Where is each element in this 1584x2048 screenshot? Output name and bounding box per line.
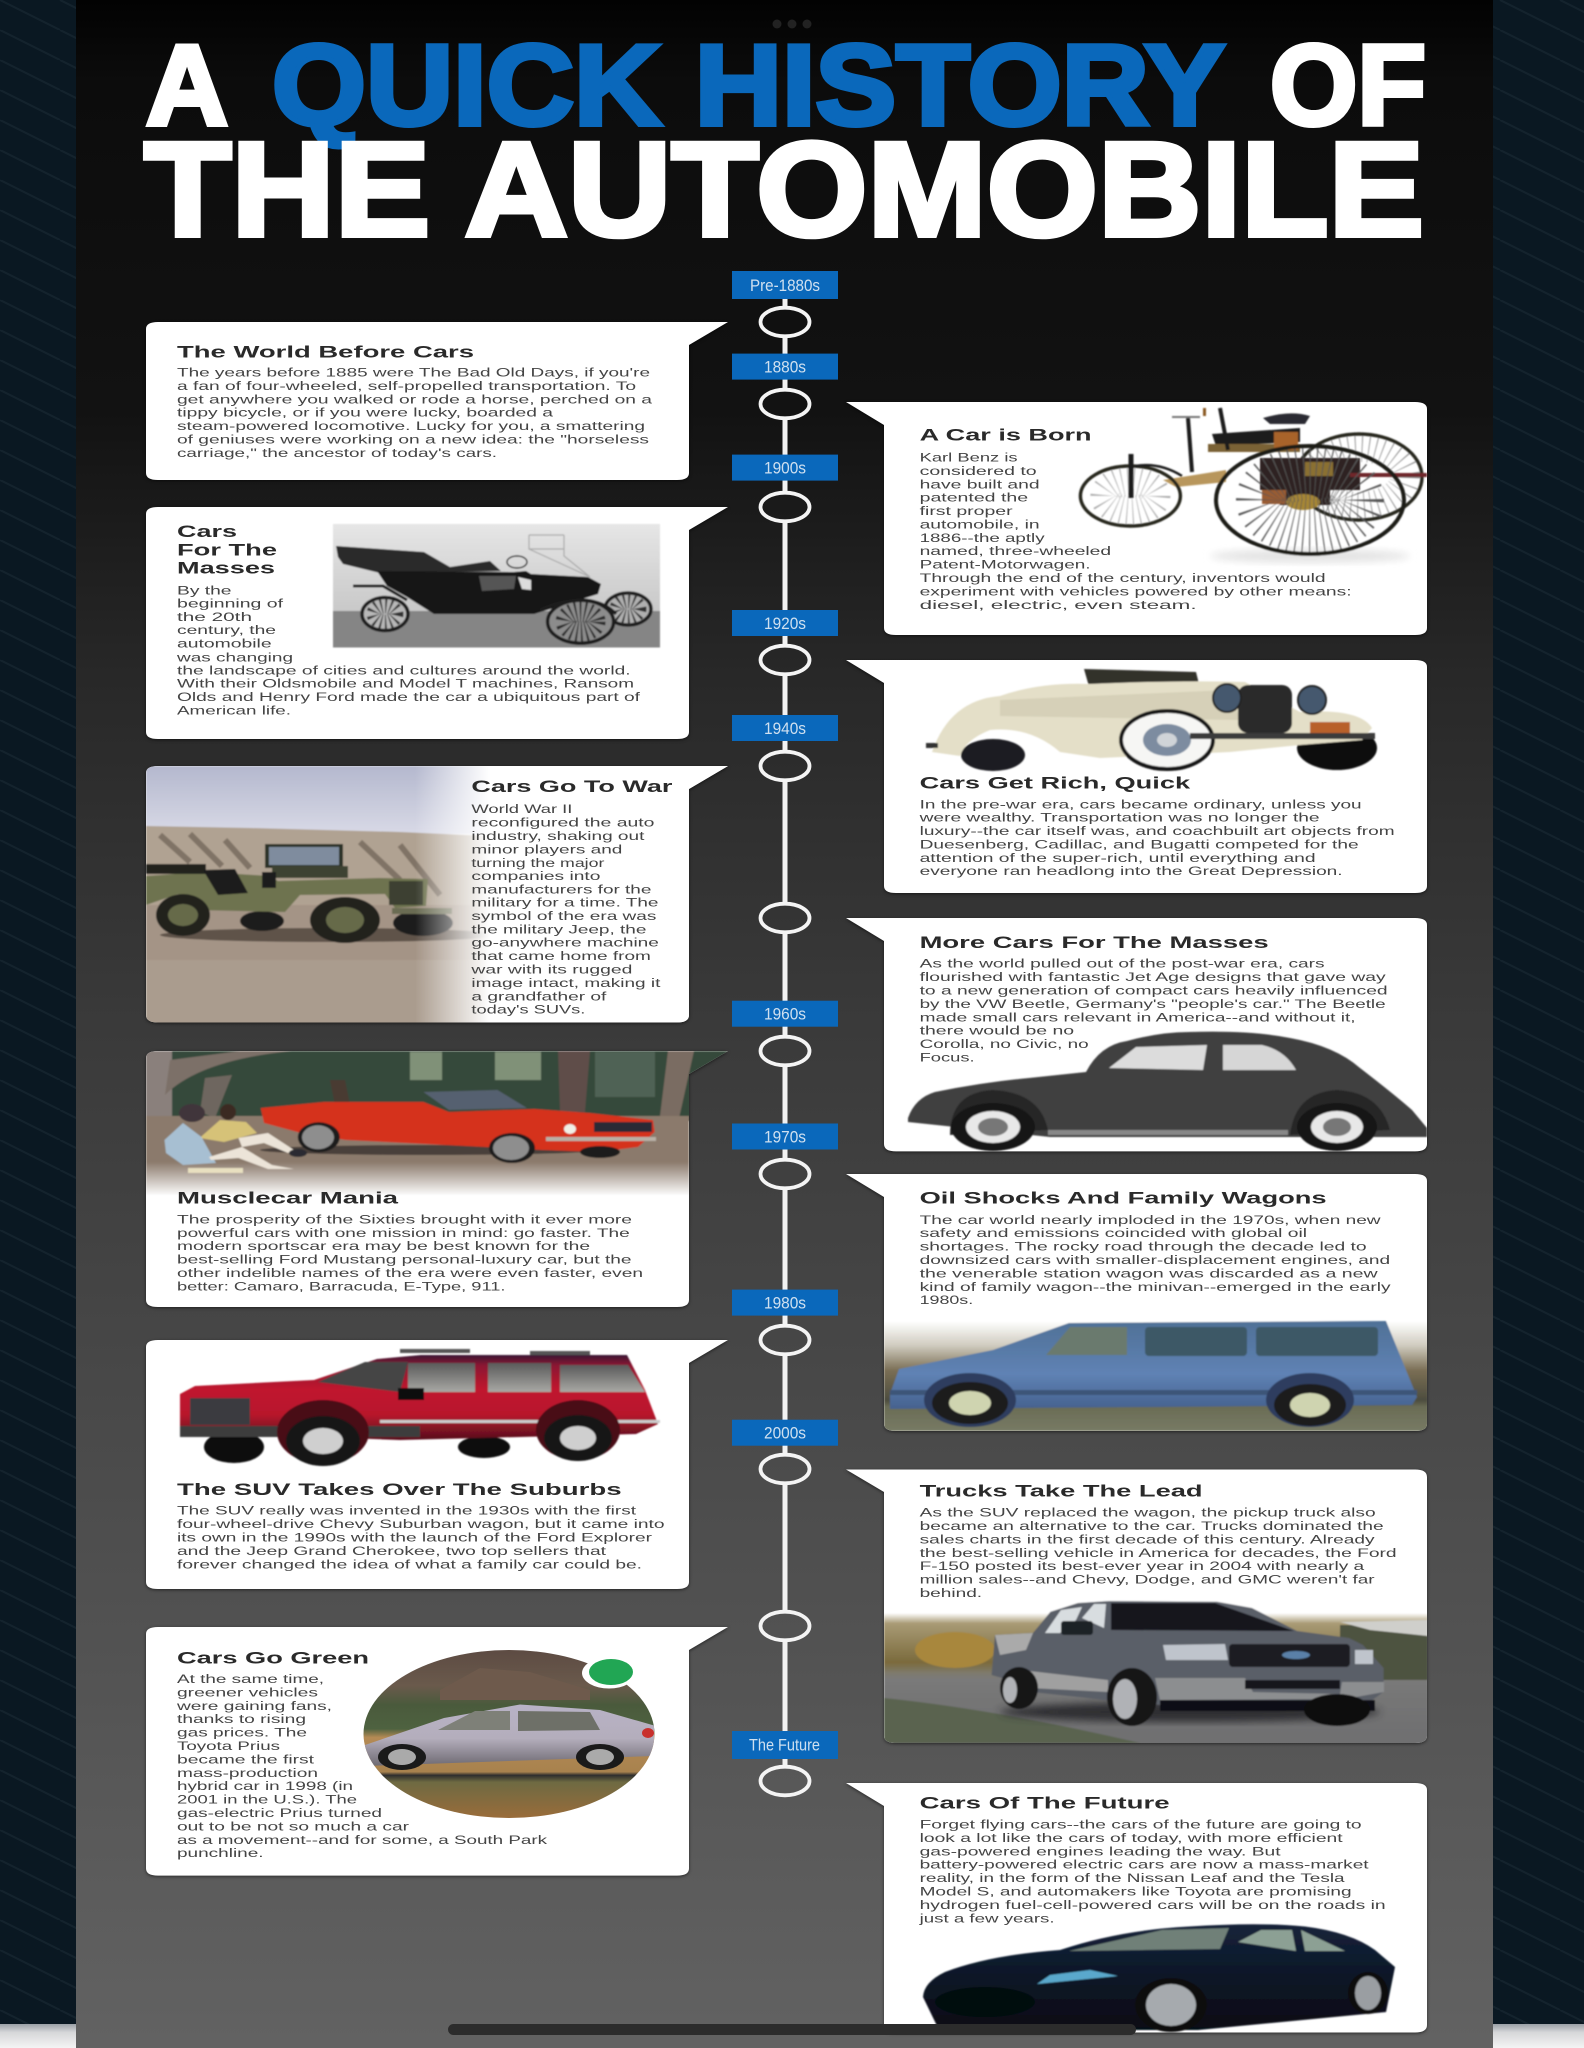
body text: there would be no: [920, 1024, 1074, 1038]
body text: [918, 798, 1395, 878]
body text: and the Jeep Grand Cherokee, two top sellers that: [177, 1544, 607, 1558]
body text: kind of family wagon--the minivan--emerged in the early: [920, 1280, 1392, 1294]
body text: other indelible names of the era were even faster, even: [177, 1266, 643, 1280]
body text: [920, 957, 1388, 1064]
image: minivan photo: [884, 1321, 1428, 1431]
panel: Cars Of The Future: [846, 1783, 1427, 2032]
era labels: 1900s: [764, 458, 806, 478]
era labels: 1960s: [764, 1005, 806, 1024]
heading: For The: [177, 541, 277, 559]
image: Prius in circular frame: [360, 1648, 660, 1820]
body text: The SUV really was invented in the 1930s with the first: [177, 1504, 637, 1518]
far wheel: [1313, 447, 1405, 507]
body text: manufacturers for the: [471, 882, 652, 896]
body text: automobile, in: [920, 517, 1040, 531]
heading: Trucks Take The Lead: [920, 1483, 1203, 1501]
body text: mass-production: [177, 1766, 318, 1780]
body text: The prosperity of the Sixties brought with it ever more: [177, 1212, 632, 1226]
body text: Forget flying cars--the cars of the future are going to: [920, 1818, 1362, 1832]
home indicator bar: [448, 2024, 1136, 2035]
heading: Cars Of The Future: [920, 1795, 1170, 1813]
body text: experiment with vehicles powered by other means:: [920, 584, 1352, 598]
body text: At the same time,: [177, 1672, 324, 1686]
panel: The World Before Cars: [146, 322, 728, 480]
body text: named, three-wheeled: [920, 544, 1111, 558]
body text: better: Camaro, Barracuda, E-Type, 911.: [177, 1279, 506, 1293]
body text: everyone ran headlong into the Great Depression.: [920, 864, 1343, 878]
body text: its own in the 1990s with the launch of the Ford Explorer: [177, 1530, 652, 1544]
body text: reality, in the form of the Nissan Leaf and the Tesla: [920, 1871, 1345, 1885]
body text: flourished with fantastic Jet Age designs that gave way: [920, 970, 1387, 984]
body text: diesel, electric, even steam.: [920, 598, 1197, 612]
body text: image intact, making it: [471, 976, 661, 990]
body text: [920, 450, 1352, 612]
body text: today's SUVs.: [471, 1003, 585, 1017]
icon: green dot: [582, 1658, 636, 1688]
heading: Cars Go Green: [177, 1650, 369, 1668]
body text: Patent-Motorwagen.: [920, 558, 1091, 572]
body text: best-selling Ford Mustang personal-luxury car, but the: [177, 1253, 632, 1267]
heading: Cars Go To War: [471, 778, 673, 796]
title: A: [146, 22, 228, 150]
body text: [175, 583, 641, 718]
body text: 1980s.: [920, 1293, 973, 1307]
body text: the 20th: [177, 610, 252, 624]
heading: A Car is Born: [920, 426, 1092, 444]
image: pickup truck photo: [884, 1595, 1428, 1745]
image: 1930s roadster: [926, 669, 1377, 771]
body text: gas-powered engines leading the way. But: [920, 1844, 1282, 1858]
body text: shortages. The rocky road through the decade led to: [920, 1240, 1367, 1254]
body text: With their Oldsmobile and Model T machines, Ransom: [177, 677, 634, 691]
era labels: The Future: [749, 1736, 820, 1755]
era labels: 1940s: [764, 719, 806, 738]
body text: a grandfather of: [471, 989, 607, 1003]
panel: Trucks Take The Lead: [846, 1470, 1428, 1745]
panel: Oil Shocks And Family Wagons: [846, 1174, 1428, 1431]
body text: greener vehicles: [177, 1685, 318, 1699]
body text: first proper: [920, 504, 1013, 518]
panel: Cars Go To War: [146, 766, 730, 1026]
body text: In the pre-war era, cars became ordinary, unless you: [920, 798, 1362, 812]
era labels: 1920s: [764, 614, 806, 633]
timeline: [732, 271, 838, 1795]
body text: war with its rugged: [470, 962, 632, 976]
era labels: 1980s: [764, 1294, 806, 1313]
panel: The SUV Takes Over The Suburbs: [146, 1340, 728, 1589]
body text: industry, shaking out: [471, 829, 645, 843]
image: red Ford Explorer: [180, 1351, 660, 1466]
body text: symbol of the era was: [471, 909, 656, 923]
image: Tesla Model S: [923, 1924, 1395, 2032]
seat: [1212, 428, 1300, 446]
heading: Musclecar Mania: [177, 1190, 399, 1208]
body text: [177, 1212, 643, 1293]
body text: turning the major: [471, 856, 604, 870]
body text: thanks to rising: [177, 1712, 306, 1726]
body text: the landscape of cities and cultures around the world.: [177, 664, 631, 678]
body text: 2001 in the U.S.). The: [177, 1793, 357, 1807]
body text: F-150 posted its best-ever year in 2004 with nearly a: [920, 1559, 1365, 1573]
body text: to a new generation of compact cars heavily influenced: [920, 984, 1388, 998]
body text: as a movement--and for some, a South Park: [177, 1833, 548, 1847]
platform: [1163, 470, 1226, 487]
body text: safety and emissions coincided with global oil: [920, 1226, 1307, 1240]
title: QUICK HISTORY: [272, 22, 1225, 150]
era labels: [732, 271, 838, 1759]
body text: have built and: [920, 477, 1040, 491]
body text: of geniuses were working on a new idea: the "horseless: [177, 432, 649, 446]
title: OF: [1270, 22, 1426, 150]
body text: million sales--and Chevy, Dodge, and GMC weren't far: [920, 1573, 1375, 1587]
body text: World War II: [471, 802, 572, 816]
body text: [175, 1672, 548, 1860]
body text: the military Jeep, the: [471, 922, 647, 936]
people: [200, 1120, 257, 1142]
body text: steam-powered locomotive. Lucky for you, a smattering: [177, 419, 645, 433]
body text: Toyota Prius: [177, 1739, 280, 1753]
body text: became the first: [177, 1752, 315, 1766]
body text: As the world pulled out of the post-war era, cars: [920, 957, 1325, 971]
body text: were wealthy. Transportation was no longer the: [918, 811, 1320, 825]
panel: Cars For The Masses: [146, 507, 728, 739]
body text: that came home from: [471, 949, 651, 963]
body text: Duesenberg, Cadillac, and Bugatti competed for the: [920, 837, 1359, 851]
body text: hydrogen fuel-cell-powered cars will be on the roads in: [920, 1898, 1386, 1912]
body text: reconfigured the auto: [471, 816, 655, 830]
era labels: Pre-1880s: [750, 276, 820, 295]
heading: Cars Get Rich, Quick: [920, 774, 1191, 792]
image: military Jeep photo: [146, 766, 730, 1026]
title: THE AUTOMOBILE: [144, 116, 1424, 264]
body text: As the SUV replaced the wagon, the pickup truck also: [920, 1506, 1376, 1520]
body text: American life.: [177, 704, 291, 718]
body text: battery-powered electric cars are now a mass-market: [920, 1858, 1370, 1872]
body text: the best-selling vehicle in America for decades, the Ford: [920, 1546, 1397, 1560]
body text: modern sportscar era may be best known for the: [177, 1239, 590, 1253]
body text: the venerable station wagon was discarded as a new: [920, 1266, 1378, 1280]
panel: Cars Get Rich, Quick: [846, 660, 1427, 893]
body text: The car world nearly imploded in the 1970s, when new: [920, 1213, 1381, 1227]
body text: attention of the super-rich, until everything and: [920, 851, 1316, 865]
front wheel: [1105, 481, 1155, 511]
body text: get anywhere you walked or rode a horse, perched on a: [177, 392, 652, 406]
image: Benz Patent-Motorwagen: [1080, 408, 1427, 563]
body text: [920, 1506, 1397, 1600]
body text: downsized cars with smaller-displacement engines, and: [920, 1253, 1390, 1267]
panel: More Cars For The Masses: [846, 918, 1427, 1151]
body text: automobile: [177, 636, 272, 650]
body text: carriage," the ancestor of today's cars.: [177, 446, 497, 460]
timeline nodes: [760, 308, 810, 1795]
body text: became an alternative to the car. Trucks dominated the: [920, 1519, 1384, 1533]
image: VW Beetle: [908, 1032, 1427, 1151]
body text: The years before 1885 were The Bad Old Days, if you're: [177, 366, 650, 380]
heading: More Cars For The Masses: [920, 934, 1269, 952]
heading: Masses: [177, 560, 275, 578]
panel: Cars Go Green: [146, 1627, 728, 1876]
body text: [918, 1818, 1386, 1925]
body text: forever changed the idea of what a family car could be.: [177, 1557, 642, 1571]
body text: By the: [177, 583, 232, 597]
body text: go-anywhere machine: [471, 936, 659, 950]
body text: [177, 366, 652, 460]
heading: Oil Shocks And Family Wagons: [920, 1190, 1327, 1208]
body text: Olds and Henry Ford made the car a ubiquitous part of: [177, 690, 641, 704]
bottom light strip: [0, 2024, 1584, 2048]
body text: Through the end of the century, inventors would: [920, 571, 1326, 585]
body text: century, the: [177, 623, 276, 637]
panel: A Car is Born: [846, 402, 1427, 635]
body text: Karl Benz is: [920, 450, 1018, 464]
body text: made small cars relevant in America--and without it,: [920, 1010, 1356, 1024]
body text: was changing: [175, 650, 293, 664]
body text: considered to: [920, 464, 1037, 478]
body text: were gaining fans,: [175, 1699, 332, 1713]
body text: tippy bicycle, or if you were lucky, boarded a: [177, 406, 553, 420]
body text: companies into: [471, 869, 601, 883]
body text: military for a time. The: [471, 896, 659, 910]
body text: Model S, and automakers like Toyota are promising: [920, 1884, 1352, 1898]
heading: The World Before Cars: [177, 343, 474, 361]
heading: Cars: [177, 523, 237, 541]
body text: beginning of: [177, 597, 284, 611]
body text: behind.: [920, 1586, 982, 1600]
era labels: 2000s: [764, 1424, 806, 1443]
heading: [177, 523, 277, 578]
top three dots: [772, 20, 812, 28]
era labels: 1970s: [764, 1128, 806, 1146]
body text: [470, 802, 661, 1017]
image: Model T photo: [333, 524, 660, 648]
body text: four-wheel-drive Chevy Suburban wagon, but it came into: [177, 1517, 665, 1531]
image: Mustang photo: [146, 1051, 728, 1203]
body text: gas prices. The: [177, 1726, 307, 1740]
body text: patented the: [920, 491, 1028, 505]
body text: look a lot like the cars of today, with more efficient: [920, 1831, 1344, 1845]
body text: just a few years.: [918, 1911, 1055, 1925]
panel: Musclecar Mania: [146, 1051, 728, 1307]
body text: hybrid car in 1998 (in: [177, 1779, 353, 1793]
body text: luxury--the car itself was, and coachbuilt art objects from: [920, 824, 1395, 838]
body text: Focus.: [920, 1050, 975, 1064]
body text: punchline.: [177, 1846, 264, 1860]
engine: [1274, 432, 1298, 450]
era labels: 1880s: [764, 358, 806, 376]
body text: a fan of four-wheeled, self-propelled transportation. To: [177, 379, 636, 393]
body text: out to be not so much a car: [177, 1819, 409, 1833]
body text: by the VW Beetle, Germany's "people's car." The Beetle: [920, 997, 1386, 1011]
body text: Corolla, no Civic, no: [920, 1037, 1089, 1051]
body text: gas-electric Prius turned: [177, 1806, 382, 1820]
title: [144, 22, 1426, 264]
body text: sales charts in the first decade of this century. Already: [920, 1532, 1376, 1546]
big wheel: [1263, 473, 1357, 527]
body text: powerful cars with one mission in mind: go faster. The: [177, 1226, 630, 1240]
body text: [920, 1213, 1392, 1307]
body text: minor players and: [471, 842, 622, 856]
body text: [177, 1504, 665, 1571]
heading: The SUV Takes Over The Suburbs: [177, 1481, 622, 1499]
body text: 1886--the aptly: [920, 531, 1046, 545]
